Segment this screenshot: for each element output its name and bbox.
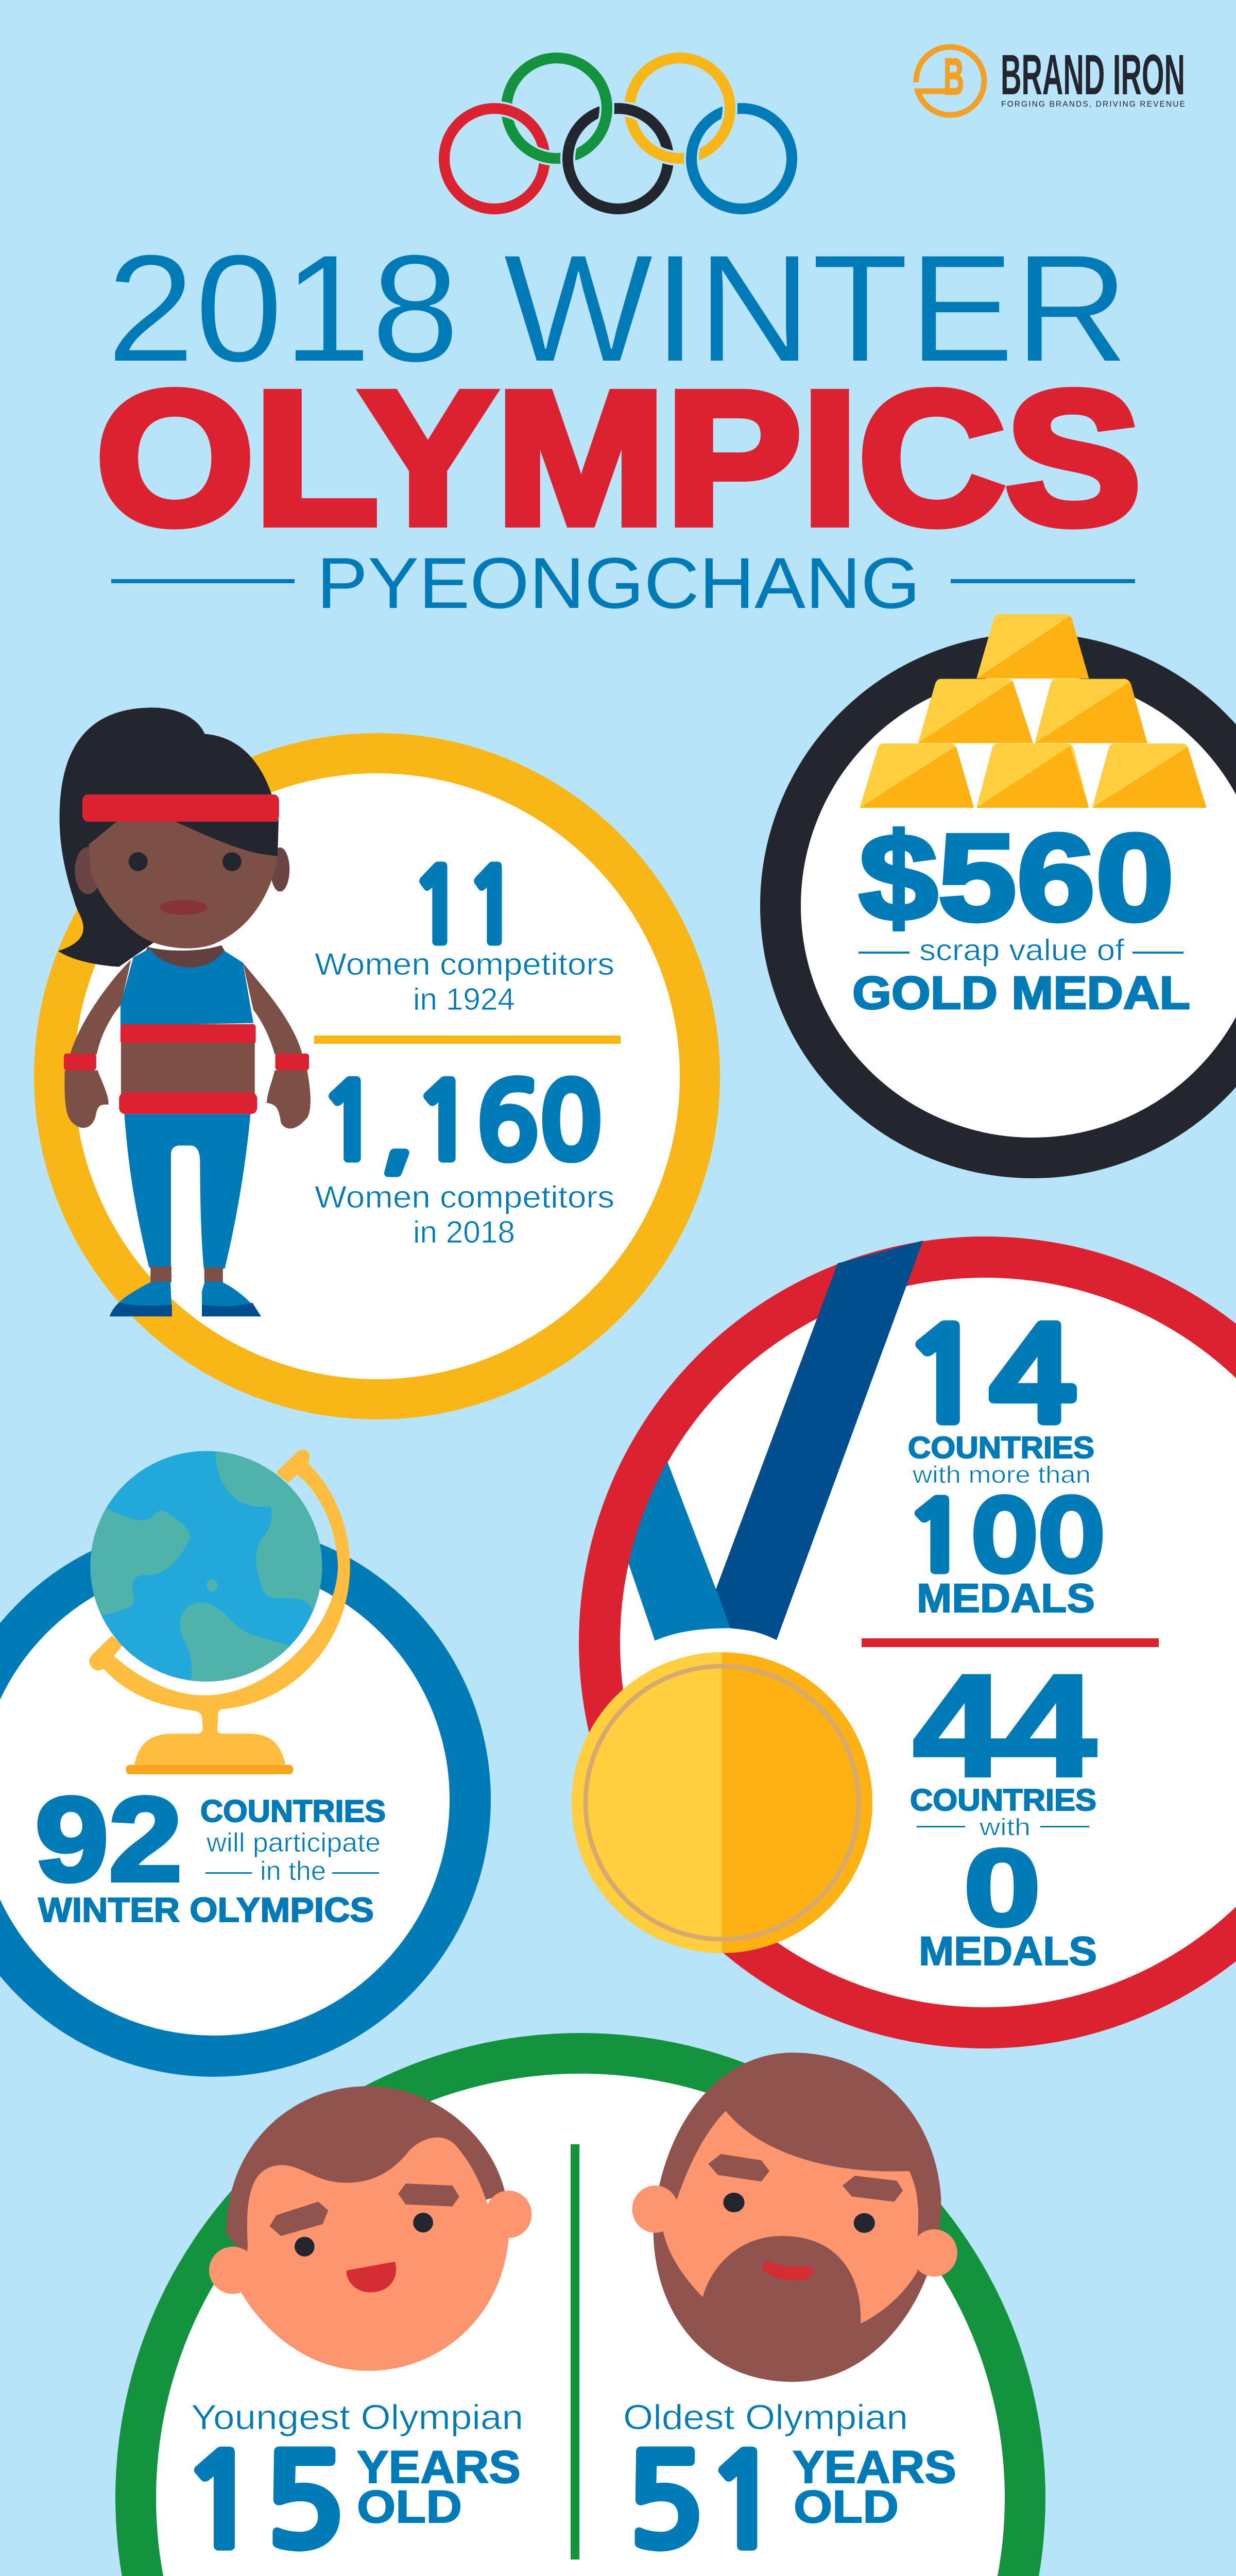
stat: 14 countries with more than 100 medals: 14 (901, 1314, 1077, 1441)
title: 2018 WINTER (107, 223, 1129, 394)
panel: participating countries (0, 1447, 470, 2056)
title (96, 223, 1141, 623)
panel: medal counts (572, 1241, 1236, 2028)
stat: 92 countries: will participate (206, 1828, 381, 1858)
stat: 11 women in 1924: 11 (410, 856, 520, 958)
label: gold medal: GOLD MEDAL (852, 968, 1190, 1019)
caption: scrap value of (859, 934, 1183, 967)
stat: 1,160 women in 2018: Women competitors (315, 1180, 614, 1214)
stat: 92 countries: in the (260, 1856, 326, 1886)
stat: 92 countries (35, 1773, 386, 1929)
stat: oldest 51 years old: Oldest Olympian (623, 2398, 908, 2437)
stat: 1,160 women in 2018 (315, 1071, 614, 1249)
stat: 44 countries with 0 medals: MEDALS (919, 1928, 1097, 1974)
stat: 14 countries with more than 100 medals: with more than (912, 1461, 1091, 1488)
stat: youngest 15 years old: OLD (357, 2481, 462, 2532)
stat: 11 women in 1924 (315, 856, 614, 1016)
logo: Brand Iron: B (943, 48, 964, 106)
stat: 44 countries with 0 medals: with (979, 1814, 1031, 1840)
stat: 14 countries with more than 100 medals: 100 (904, 1490, 1105, 1585)
olympic rings (444, 58, 792, 209)
panel: women competitors (54, 707, 700, 1399)
panel: gold medal scrap value (781, 614, 1236, 1158)
icon: gold bars (860, 614, 1207, 808)
logo: Brand Iron (916, 43, 1185, 115)
stat: 92 countries: COUNTRIES (200, 1794, 386, 1828)
stat: 44 countries with 0 medals: 0 (964, 1826, 1041, 1948)
stat: oldest 51 years old: YEARS (793, 2441, 956, 2493)
caption: scrap value of: scrap value of (919, 934, 1125, 967)
title: PYEONGCHANG (317, 543, 920, 623)
logo: Brand Iron: FORGING BRANDS, DRIVING REVENUE (1001, 100, 1185, 109)
stat: oldest 51 years old (623, 2398, 956, 2567)
stat: 92 countries: WINTER OLYMPICS (38, 1891, 374, 1929)
icon: oldest olympian face (632, 2053, 957, 2382)
stat: 1,160 women in 2018: 1,160 (318, 1071, 603, 1175)
stat: 14 countries with more than 100 medals (901, 1314, 1105, 1621)
stat: 14 countries with more than 100 medals: MEDALS (917, 1575, 1095, 1621)
stat: 44 countries with 0 medals: COUNTRIES (910, 1783, 1096, 1817)
stat: youngest 15 years old: YEARS (357, 2441, 521, 2493)
title: OLYMPICS (96, 352, 1141, 564)
stat: 44 countries with 0 medals (910, 1646, 1097, 1974)
icon: medal with ribbon (572, 1241, 923, 1953)
stat: 11 women in 1924: in 1924 (413, 982, 515, 1016)
stat: $560: $560 (859, 808, 1174, 946)
stat: oldest 51 years old: 51 (625, 2439, 784, 2567)
icon: globe (83, 1447, 350, 1774)
panel: youngest and oldest olympians (115, 2033, 1045, 2576)
stat: oldest 51 years old: OLD (794, 2481, 899, 2532)
stat: 44 countries with 0 medals: 44 (913, 1646, 1097, 1806)
stat: 11 women in 1924: Women competitors (315, 947, 614, 981)
stat: 1,160 women in 2018: in 2018 (413, 1215, 515, 1249)
icon: youngest olympian face (209, 2086, 531, 2371)
icon: female athlete (58, 707, 311, 1316)
stat: youngest 15 years old: Youngest Olympian (191, 2398, 523, 2437)
stat: 14 countries with more than 100 medals: COUNTRIES (908, 1431, 1094, 1465)
stat: youngest 15 years old: 15 (180, 2439, 346, 2567)
stat: youngest 15 years old (180, 2398, 523, 2567)
stat: 92 countries: 92 (35, 1773, 182, 1906)
